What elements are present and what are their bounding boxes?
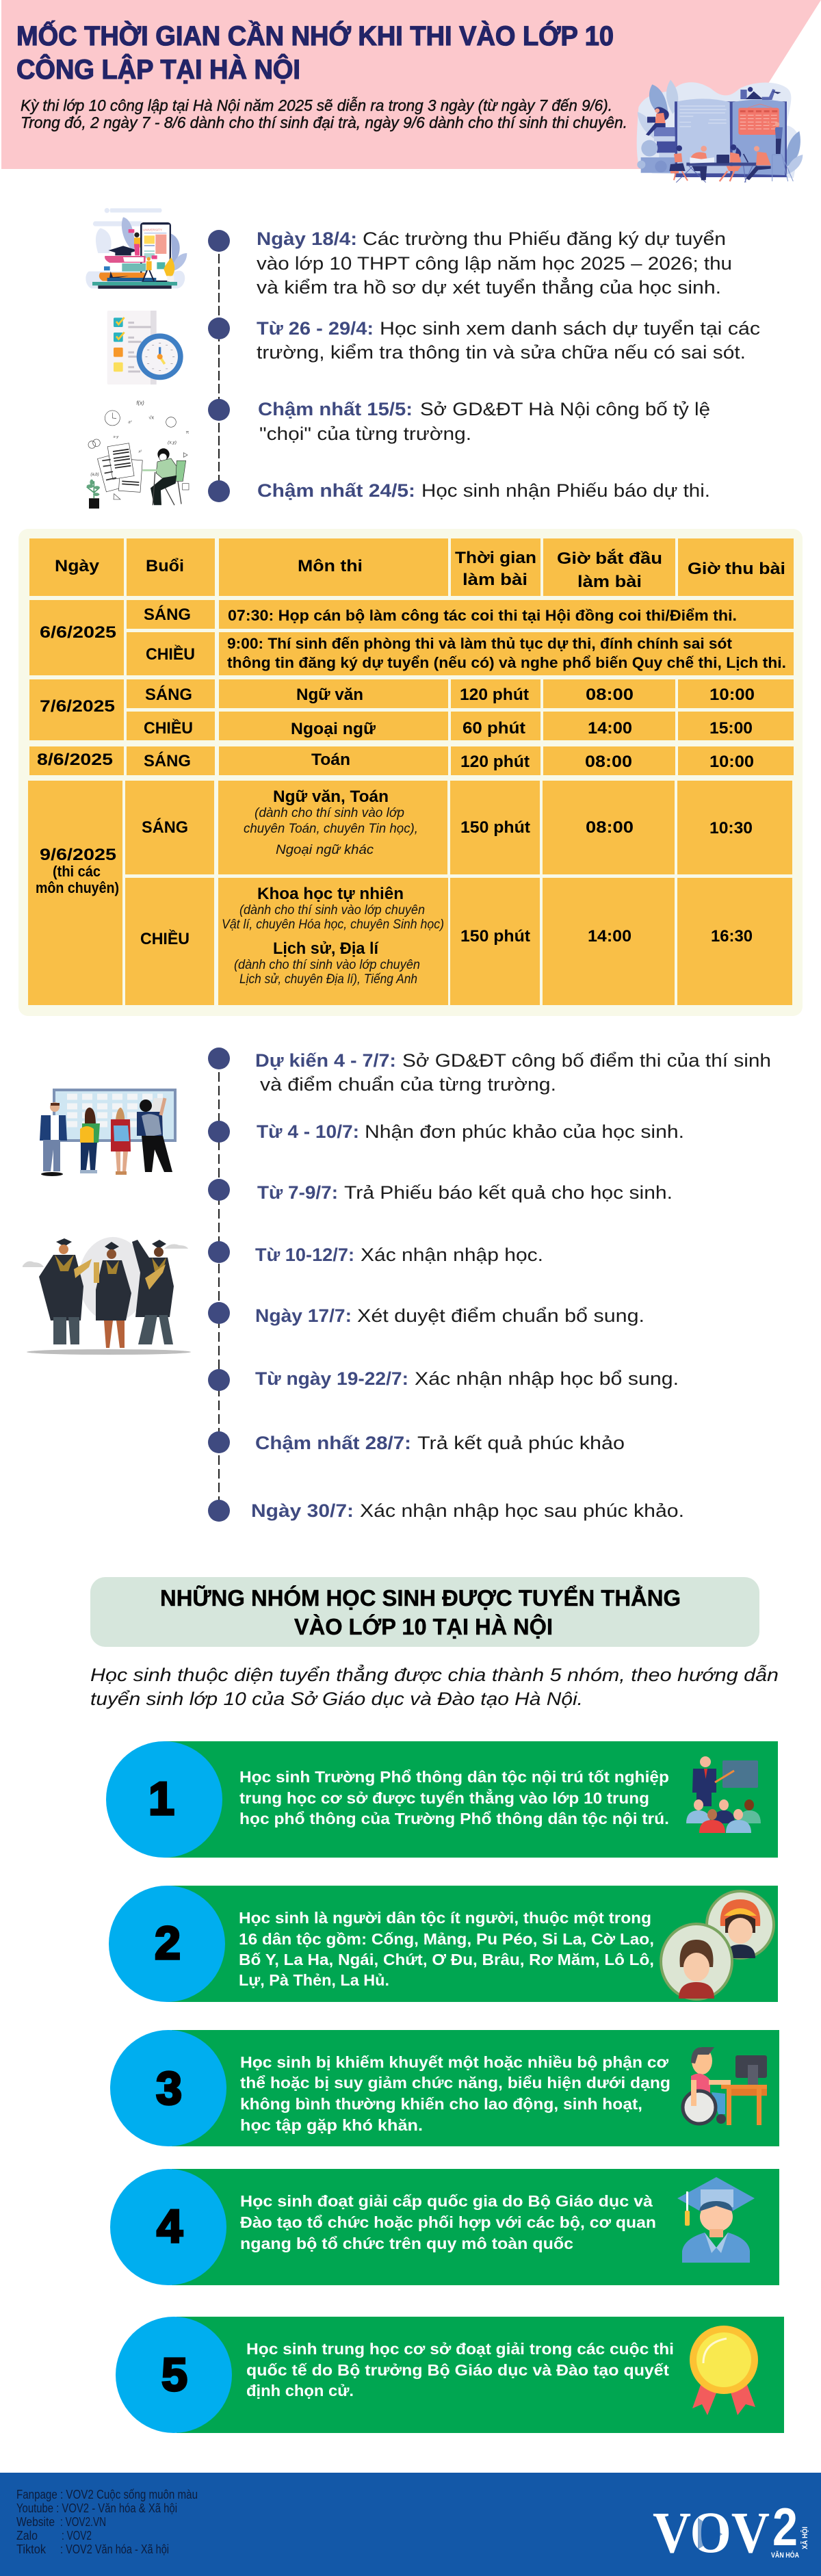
timeline entry: Chậm nhất 15/5: "chọi" của từng trường. (259, 424, 471, 444)
timeline entry: Dự kiến 4 - 7/7: Dự kiến 4 - 7/7: (255, 1050, 396, 1071)
icon: checklist and clock (107, 311, 183, 385)
table row: 7/6/2025: CHIỀU (144, 718, 193, 738)
card 1: trung học cơ sở được tuyển thẳng vào lớp 10 trung (239, 1788, 649, 1807)
icon: student studying with math symbols: √x (148, 415, 154, 421)
icon: open book classroom illustration (637, 80, 803, 183)
timeline entry: Từ ngày 19-22/7: Xác nhận nhập học bổ sung. (415, 1368, 679, 1389)
intro text: Trong đó, 2 ngày 7 - 8/6 dành cho thí sinh đại trà, ngày 9/6 dành cho thí sinh thi chuyên. (21, 114, 627, 131)
timeline entry: Từ 10-12/7: Xác nhận nhập học. (361, 1245, 543, 1265)
table row: 8/6/2025: SÁNG (144, 751, 191, 770)
VOV2 logo: XÃ HỘI (800, 2527, 809, 2549)
icon: ethnic boy portrait (661, 1924, 732, 1999)
timeline entry: Chậm nhất 24/5: Chậm nhất 24/5: (257, 480, 415, 501)
table row: 8/6/2025: 120 phút (460, 753, 530, 771)
table header row: làm bài (462, 571, 527, 589)
card 5: định chọn cử. (246, 2382, 354, 2399)
card 5: Học sinh trung học cơ sở đoạt giải trong các cuộc thi (246, 2340, 674, 2358)
timeline entry: Chậm nhất 28/7: Chậm nhất 28/7: (255, 1433, 411, 1453)
table row: 9/6/2025: 10:30 (709, 819, 753, 837)
table row: 9/6/2025: Lịch sử, Địa lí (273, 939, 379, 958)
icon: graduates in gowns (23, 1237, 191, 1355)
table row: 9/6/2025: (thi các (53, 863, 101, 880)
section intro text: Học sinh thuộc diện tuyển thẳng được chia thành 5 nhóm, theo hướng dẫn (90, 1663, 779, 1685)
footer social links: : VOV2 (62, 2529, 92, 2542)
section intro text (90, 1663, 779, 1709)
table header row: Buổi (146, 557, 184, 575)
timeline entry: Ngày 30/7 (208, 1500, 684, 1522)
timeline entry: Từ ngày 19-22/7 (208, 1368, 679, 1391)
footer social links: Fanpage : VOV2 Cuộc sống muôn màu (16, 2488, 198, 2501)
table header row: làm bài (577, 573, 642, 591)
timeline entry: Ngày 18/4: vào lớp 10 THPT công lập năm học 2025 – 2026; thu (257, 253, 732, 274)
table row: 7/6/2025: 7/6/2025 (40, 697, 115, 716)
timeline entry: Từ ngày 19-22/7: Từ ngày 19-22/7: (255, 1368, 408, 1389)
timeline entry: Từ 26 - 29/4: trường, kiểm tra thông tin và sửa chữa nếu có sai sót. (257, 342, 746, 363)
timeline entry: Chậm nhất 15/5: Chậm nhất 15/5: (258, 399, 413, 419)
timeline entry: Dự kiến 4 - 7/7: và điểm chuẩn của từng trường. (260, 1074, 556, 1095)
VOV2 logo: VĂN HÓA (771, 2551, 799, 2560)
icon: phone and books illustration: UNIVERSITY (143, 228, 162, 231)
table header row: Giờ bắt đầu (557, 549, 662, 568)
card 3 (110, 2030, 779, 2146)
table row: 9/6/2025: Ngoại ngữ khác (276, 843, 374, 857)
card 2: 2 (155, 1917, 181, 1969)
icon: ethnic girl portrait (707, 1891, 774, 1958)
timeline entry: Chậm nhất 24/5 (208, 480, 710, 502)
table row: 9/6/2025: 08:00 (586, 818, 634, 837)
timeline entry: Từ 10-12/7 (208, 1241, 543, 1265)
card 3: thể hoặc bị suy giảm chức năng, biểu hiện dưới dạng (240, 2074, 670, 2092)
table row: 9/6/2025: Khoa học tự nhiên (257, 885, 404, 903)
timeline entry: Từ 7-9/7 (208, 1179, 673, 1203)
card 2 (109, 1886, 778, 2002)
table row: 8/6/2025: 8/6/2025 (37, 751, 113, 769)
timeline entry: Từ 7-9/7: Từ 7-9/7: (257, 1182, 338, 1203)
card 5: 5 (161, 2349, 187, 2401)
section heading (90, 1577, 759, 1647)
timeline entry: Dự kiến 4 - 7/7 (208, 1048, 771, 1095)
card 3: không bình thường khiến cho lao động, sinh hoạt, (240, 2095, 642, 2113)
timeline entry: Ngày 17/7 (208, 1302, 644, 1326)
icon: student studying with math symbols: π (186, 430, 190, 434)
timeline entry: Chậm nhất 28/7 (208, 1431, 625, 1453)
card 3: học tập gặp khó khăn. (240, 2116, 423, 2134)
table header row: Giờ thu bài (688, 560, 785, 578)
timeline entry: Ngày 17/7: Xét duyệt điểm chuẩn bổ sung. (357, 1305, 644, 1326)
section heading: VÀO LỚP 10 TẠI HÀ NỘI (294, 1613, 553, 1639)
card 5 (116, 2317, 784, 2433)
timeline entry: Ngày 18/4: Ngày 18/4: (257, 229, 357, 249)
table row: 9/6/2025: (dành cho thí sinh vào lớp (255, 806, 404, 820)
table row: 7/6/2025: SÁNG (145, 685, 192, 704)
icon: medal with ribbons (690, 2326, 758, 2415)
card 1: 1 (148, 1773, 174, 1825)
icon: student studying with math symbols: x-y (113, 435, 119, 439)
table row: 9/6/2025: chuyên Toán, chuyên Tin học), (244, 822, 418, 836)
icon: student studying with math symbols: f(x) (136, 400, 144, 406)
card 2: Bố Y, La Ha, Ngái, Chứt, Ơ Đu, Brâu, Rơ Măm, Lô Lô, (239, 1951, 654, 1968)
timeline entry: Ngày 18/4: Các trường thu Phiếu đăng ký dự tuyển (363, 229, 726, 249)
table row: 9/6/2025: môn chuyên) (36, 879, 119, 896)
timeline entry: Chậm nhất 15/5: Sở GD&ĐT Hà Nội công bố tỷ lệ (420, 399, 710, 419)
table row: 9/6/2025: 16:30 (711, 927, 753, 946)
icon: student studying with math symbols: (a,b) (90, 473, 99, 477)
card 3: Học sinh bị khiếm khuyết một hoặc nhiều bộ phận cơ (240, 2053, 668, 2071)
section intro text: tuyển sinh lớp 10 của Sở Giáo dục và Đào tạo Hà Nội. (90, 1689, 583, 1709)
table row: 9/6/2025: SÁNG (142, 818, 188, 837)
table row: 9/6/2025: Vật lí, chuyên Hóa học, chuyên Sinh học) (222, 918, 444, 932)
footer social links: Website (16, 2515, 55, 2529)
table row: 9/6/2025 (28, 781, 792, 1005)
table row: 9/6/2025: 150 phút (460, 927, 530, 946)
footer (0, 2473, 821, 2576)
table row: 7/6/2025: 10:00 (709, 686, 755, 704)
icon: students at notice board (40, 1089, 177, 1176)
section heading: NHỮNG NHÓM HỌC SINH ĐƯỢC TUYỂN THẲNG (160, 1585, 681, 1611)
table header row: Thời gian (455, 549, 536, 567)
title: MỐC THỜI GIAN CẦN NHỚ KHI THI VÀO LỚP 10 (16, 20, 614, 51)
card 5: quốc tế do Bộ trưởng Bộ Giáo dục và Đào tạo quyết (246, 2361, 669, 2379)
timeline: first phase (208, 229, 760, 502)
card 4: Đào tạo tổ chức hoặc phối hợp với các bộ, cơ quan (240, 2213, 656, 2231)
table row: 8/6/2025: Toán (311, 751, 350, 769)
icon: student studying with math symbols: (x,y) (168, 440, 177, 445)
footer social links: Zalo (16, 2529, 38, 2542)
timeline: second phase (208, 1048, 771, 1522)
table row: 9/6/2025: Lịch sử, chuyên Địa lí), Tiếng Anh (239, 972, 417, 987)
title (16, 20, 614, 85)
table row: 8/6/2025: 08:00 (585, 753, 632, 771)
table row: 6/6/2025 (29, 600, 794, 675)
icon: student studying with math symbols (87, 400, 190, 508)
table row: 9/6/2025: 14:00 (588, 927, 631, 946)
title: CÔNG LẬP TẠI HÀ NỘI (16, 53, 300, 85)
card 3: 3 (156, 2062, 182, 2114)
card 1: học phổ thông của Trường Phổ thông dân tộc nội trú. (239, 1810, 669, 1827)
panel: exam schedule table (18, 529, 803, 1016)
footer social links: Youtube : VOV2 - Văn hóa & Xã hội (16, 2501, 177, 2515)
table row: 6/6/2025: 07:30: Họp cán bộ làm công tác coi thi tại Hội đồng coi thi/Điểm thi. (228, 607, 737, 624)
table row: 6/6/2025: CHIỀU (146, 645, 195, 664)
table row: 7/6/2025: 120 phút (460, 686, 529, 704)
VOV2 logo: VOV (653, 2499, 770, 2565)
card 1: Học sinh Trường Phổ thông dân tộc nội trú tốt nghiệp (239, 1768, 669, 1786)
footer social links (16, 2488, 198, 2556)
table row: 7/6/2025: Ngữ văn (296, 686, 363, 704)
timeline entry: Từ 4 - 10/7: Từ 4 - 10/7: (257, 1121, 359, 1142)
VOV2 logo: 2 (772, 2497, 798, 2557)
card 4: ngang bộ tổ chức trên quy mô toàn quốc (240, 2235, 573, 2252)
card 2: Lự, Pà Thẻn, La Hủ. (239, 1971, 389, 1989)
timeline entry: Dự kiến 4 - 7/7: Sở GD&ĐT công bố điểm thi của thí sinh (402, 1050, 771, 1071)
table row: 9/6/2025: (dành cho thí sinh vào lớp chuyên (234, 958, 420, 972)
icon: student studying with math symbols: x² (138, 450, 142, 454)
icon: student in wheelchair at desk (683, 2047, 767, 2125)
table header row (29, 538, 794, 596)
timeline entry: Từ 26 - 29/4: Từ 26 - 29/4: (257, 318, 374, 339)
header banner (1, 0, 821, 183)
table row: 7/6/2025: 60 phút (462, 719, 525, 738)
table row: 7/6/2025: Ngoại ngữ (291, 720, 376, 738)
table row: 7/6/2025: 14:00 (588, 719, 632, 738)
intro text (21, 96, 627, 131)
timeline entry: Từ 4 - 10/7: Nhận đơn phúc khảo của học sinh. (365, 1121, 684, 1142)
intro text: Kỳ thi lớp 10 công lập tại Hà Nội năm 2025 sẽ diễn ra trong 3 ngày (từ ngày 7 đến 9/6). (21, 96, 612, 114)
table row: 9/6/2025: 9/6/2025 (40, 846, 116, 864)
table row: 7/6/2025: 15:00 (709, 719, 753, 738)
timeline entry: Từ 26 - 29/4: Học sinh xem danh sách dự tuyển tại các (380, 318, 760, 339)
table header row: Ngày (55, 557, 100, 575)
footer social links: Tiktok (16, 2542, 47, 2556)
card 4 (110, 2169, 779, 2285)
timeline entry: Ngày 18/4 (208, 229, 732, 298)
table row: 7/6/2025 (29, 679, 794, 740)
table row: 6/6/2025: 9:00: Thí sinh đến phòng thi và làm thủ tục dự thi, đính chính sai sót (227, 635, 733, 652)
table row: 9/6/2025: (dành cho thí sinh vào lớp chuyên (239, 903, 425, 918)
card 1 (106, 1741, 778, 1858)
table row: 7/6/2025: 08:00 (586, 686, 634, 704)
icon: graduate with cap (677, 2177, 755, 2263)
card 4: 4 (157, 2200, 183, 2252)
timeline entry: Từ 7-9/7: Trả Phiếu báo kết quả cho học sinh. (344, 1182, 673, 1203)
timeline entry: Ngày 18/4: và kiểm tra hồ sơ dự xét tuyển thẳng của học sinh. (257, 276, 721, 298)
timeline entry: Từ 10-12/7: Từ 10-12/7: (255, 1245, 354, 1265)
icon: student studying with math symbols: a² (128, 420, 132, 424)
table row: 6/6/2025: 6/6/2025 (40, 623, 116, 642)
timeline entry: Chậm nhất 15/5 (208, 399, 710, 444)
card 4: Học sinh đoạt giải cấp quốc gia do Bộ Giáo dục và (240, 2192, 653, 2210)
table header row: Môn thi (298, 557, 363, 575)
table row: 6/6/2025: thông tin đăng ký dự tuyển (nếu có) và nghe phổ biến Quy chế thi, Lịch thi. (227, 654, 786, 671)
card 2: Học sinh là người dân tộc ít người, thuộc một trong (239, 1909, 651, 1927)
icon: teacher and students (686, 1756, 761, 1833)
timeline entry: Ngày 17/7: Ngày 17/7: (255, 1305, 352, 1326)
table row: 6/6/2025: SÁNG (144, 605, 191, 624)
timeline entry: Từ 26 - 29/4 (208, 317, 760, 363)
table row: 8/6/2025: 10:00 (709, 753, 754, 771)
table row: 8/6/2025 (29, 746, 794, 775)
timeline entry: Ngày 30/7: Xác nhận nhập học sau phúc khảo. (360, 1500, 684, 1521)
card 2: 16 dân tộc gồm: Cống, Mảng, Pu Péo, Si La, Cờ Lao, (239, 1930, 654, 1948)
timeline entry: Chậm nhất 24/5: Học sinh nhận Phiếu báo dự thi. (421, 480, 710, 501)
footer social links: : VOV2.VN (60, 2515, 106, 2529)
footer social links: : VOV2 Văn hóa - Xã hội (60, 2542, 169, 2556)
timeline entry: Chậm nhất 28/7: Trả kết quả phúc khảo (417, 1433, 625, 1453)
timeline entry: Từ 4 - 10/7 (208, 1121, 684, 1143)
table row: 9/6/2025: 150 phút (460, 818, 530, 837)
table row: 9/6/2025: Ngữ văn, Toán (273, 788, 389, 806)
timeline entry: Ngày 30/7: Ngày 30/7: (251, 1500, 354, 1521)
table row: 9/6/2025: CHIỀU (140, 929, 190, 948)
icon: phone and books illustration (86, 208, 187, 289)
